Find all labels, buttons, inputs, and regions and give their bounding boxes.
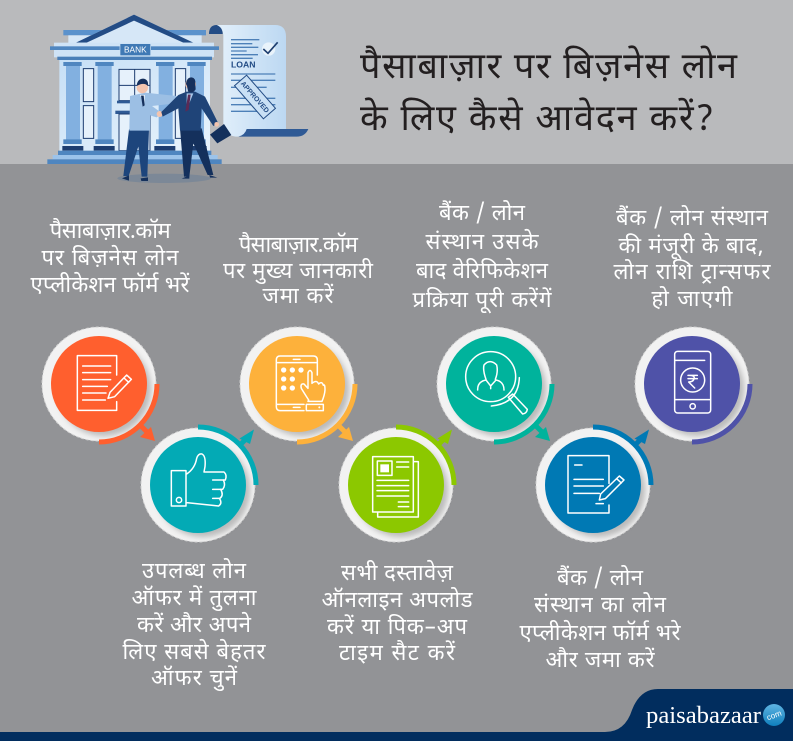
- step 2: compare offers: [122, 427, 266, 694]
- step 2 arrow: [240, 430, 254, 445]
- step 7 circle: [635, 327, 750, 442]
- text: step 2 caption: [122, 558, 266, 694]
- text: step 5 caption: संस्थान उसके: [426, 228, 540, 258]
- ground shadow: [117, 174, 211, 183]
- icon: loan document: [209, 25, 308, 137]
- text: step 7 caption: की मंजूरी के बाद,: [618, 232, 764, 262]
- step 1 circle: [42, 327, 157, 442]
- text: step 1 caption: [30, 217, 190, 301]
- text: step 2 caption: लिए सबसे बेहतर: [122, 638, 266, 668]
- text: step 1 caption: पर बिज़नेस लोन: [42, 244, 179, 274]
- body background: [0, 164, 793, 741]
- step 6 circle: [536, 427, 651, 542]
- text: step 7 caption: [614, 205, 772, 315]
- header band: [0, 0, 793, 164]
- step 6: submit application: [520, 427, 682, 676]
- logo .com badge: [763, 704, 785, 726]
- text: step 6 caption: संस्थान का लोन: [534, 592, 667, 621]
- text: step 5 caption: बाद वेरिफिकेशन: [416, 257, 549, 287]
- text: step 6 caption: एप्लीकेशन फॉर्म भरे: [520, 619, 682, 649]
- title: के लिए कैसे आवेदन करें?: [360, 97, 714, 145]
- text: step 3 caption: पैसाबाज़ार.कॉम: [239, 231, 359, 261]
- title: पैसाबाज़ार पर बिज़नेस लोन: [360, 45, 738, 93]
- step 4 arrow: [438, 430, 452, 445]
- icon: bank building: [47, 15, 222, 164]
- step 2 circle: [141, 427, 256, 542]
- step 7: transfer: [614, 205, 772, 442]
- step 3 circle: [240, 327, 355, 442]
- text: step 2 caption: ऑफर चुनें: [151, 665, 238, 694]
- text: step 2 caption: करें और अपने: [137, 611, 252, 641]
- step 4 circle: [339, 427, 454, 542]
- logo wordmark: paisabazaar: [646, 703, 761, 729]
- text: step 2 caption: उपलब्ध लोन: [142, 558, 247, 587]
- text: step 4 caption: सभी दस्तावेज़: [341, 559, 454, 589]
- text: step 6 caption: [520, 565, 682, 676]
- text: step 4 caption: करें या पिक–अप: [327, 614, 468, 643]
- text: step 6 caption: और जमा करें: [546, 647, 656, 676]
- icon: phone with rupee: [675, 351, 711, 413]
- icon: thumbs up: [171, 454, 226, 506]
- text: step 6 caption: बैंक / लोन: [557, 565, 644, 594]
- text: step 2 caption: ऑफर में तुलना: [132, 585, 257, 614]
- title: [360, 45, 738, 145]
- step 4: upload documents: [322, 427, 473, 669]
- icon: man in dark suit with briefcase: [161, 77, 231, 179]
- text: step 3 caption: जमा करें: [262, 283, 334, 312]
- text: step 3 caption: पर मुख्य जानकारी: [223, 258, 373, 287]
- icon: magnifier with person: [466, 352, 527, 414]
- step 1 arrow: [140, 425, 155, 441]
- text: step 7 caption: लोन राशि ट्रान्सफर: [614, 259, 772, 288]
- step 3: submit details: [223, 231, 373, 442]
- text: step 4 caption: [322, 559, 473, 669]
- icon: bank building: BANK: [124, 44, 147, 54]
- icon: form with pen: [568, 456, 624, 513]
- text: step 7 caption: हो जाएगी: [652, 286, 733, 315]
- text: step 3 caption: [223, 231, 373, 312]
- step 5: verification: [412, 200, 552, 442]
- icon: documents: [373, 457, 418, 517]
- footer bar and logo: [0, 689, 793, 741]
- text: step 4 caption: ऑनलाइन अपलोड: [322, 587, 473, 616]
- icon: man in light jacket: [122, 79, 177, 181]
- icon: loan document: LOAN: [231, 60, 256, 70]
- text: step 1 caption: पैसाबाज़ार.कॉम: [50, 217, 172, 247]
- illustration: bank, loan paper and handshake: [47, 15, 308, 183]
- step 1: fill form: [30, 217, 190, 442]
- icon: loan document: APPROVED: [239, 80, 270, 115]
- step 5 circle: [437, 327, 552, 442]
- logo .com badge: com: [766, 709, 783, 722]
- text: step 1 caption: एप्लीकेशन फॉर्म भरें: [30, 271, 190, 301]
- icon: tablet with touch: [276, 356, 325, 411]
- step 6 arrow: [634, 430, 649, 445]
- step 5 arrow: [535, 425, 550, 441]
- step 3 arrow: [338, 425, 353, 441]
- text: step 7 caption: बैंक / लोन संस्थान: [616, 205, 769, 234]
- text: step 4 caption: टाइम सैट करें: [339, 639, 456, 669]
- text: step 5 caption: प्रक्रिया पूरी करेंगें: [412, 287, 552, 316]
- text: step 5 caption: [412, 200, 552, 316]
- text: step 5 caption: बैंक / लोन: [439, 200, 526, 229]
- icon: document with pencil: [77, 356, 131, 410]
